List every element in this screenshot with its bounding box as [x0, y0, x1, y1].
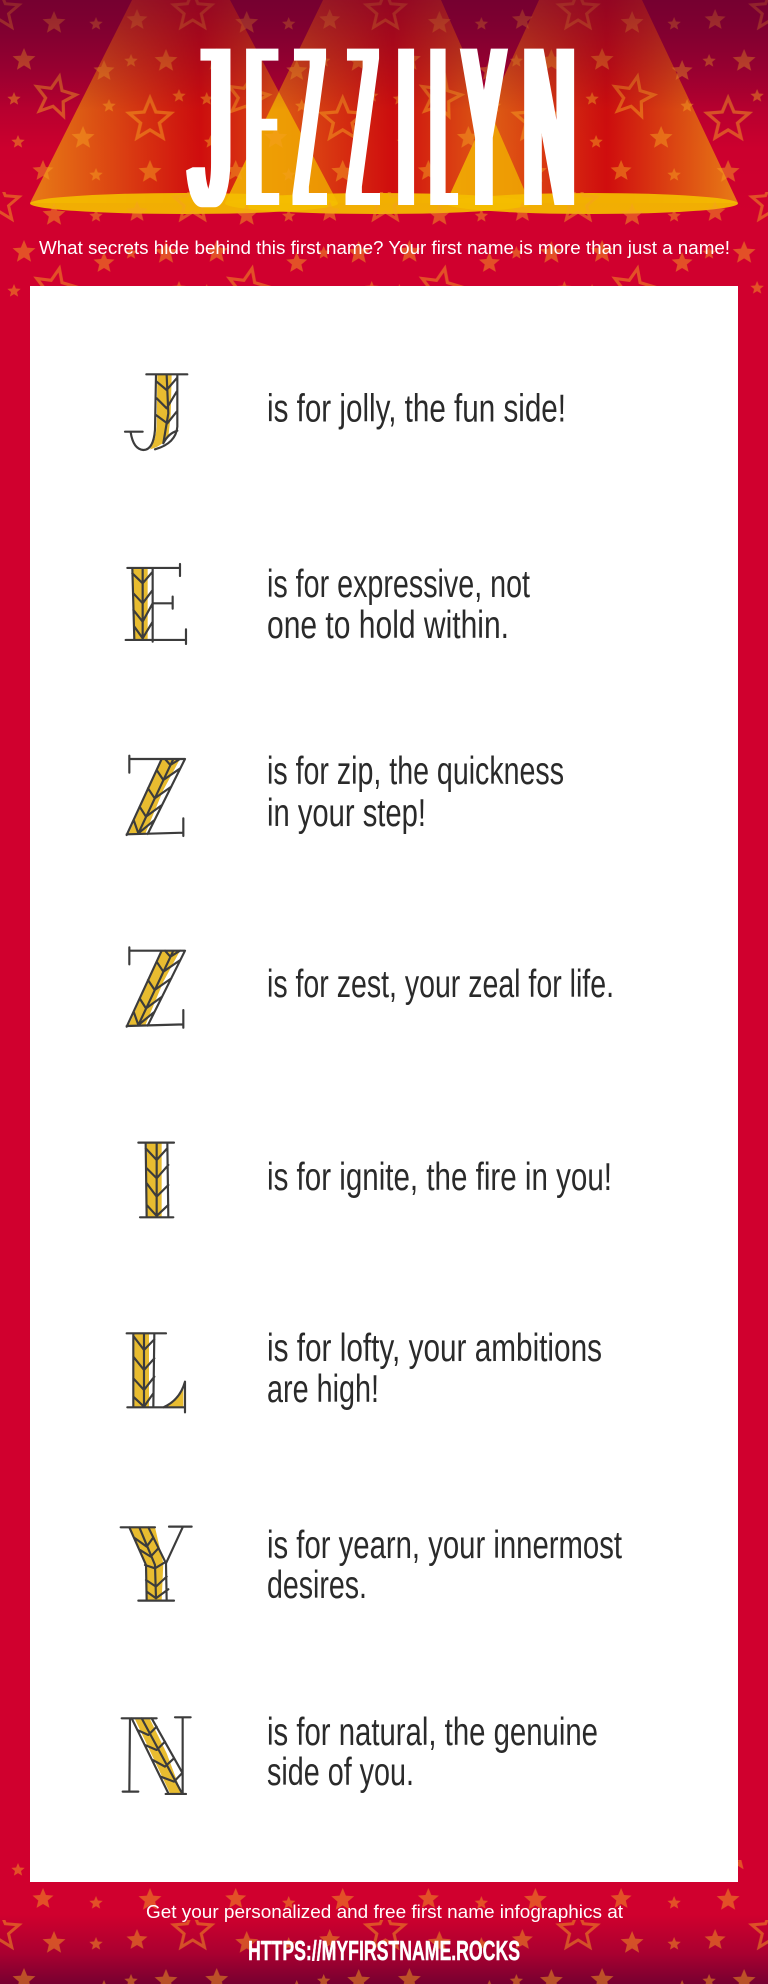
row: J — [125, 374, 566, 450]
row: Y — [121, 1524, 622, 1607]
title: I — [400, 0, 412, 258]
star pattern: top — [0, 0, 768, 302]
text: J: is for jolly, the fun side! — [267, 388, 566, 430]
title: Z — [350, 0, 375, 258]
footer url: HTTPS://MYFIRSTNAME.ROCKS — [248, 1935, 520, 1966]
text: N: is for natural, the genuine — [267, 1711, 598, 1754]
subtitle: What secrets hide behind this first name? Your first name is more than just a name! — [39, 238, 730, 258]
title: Z — [297, 0, 322, 258]
icon: letter J — [125, 374, 187, 450]
title — [190, 0, 574, 259]
star pattern: bottom — [0, 1860, 768, 1984]
title: L — [433, 0, 453, 258]
icon: letter N — [122, 1717, 191, 1794]
icon: letter I — [138, 1143, 174, 1217]
text: Y: is for yearn, your innermost — [267, 1524, 622, 1567]
text: E: is for expressive, not — [267, 563, 530, 606]
icon: letter Y — [121, 1527, 192, 1601]
title: Y — [463, 0, 504, 259]
row: N — [122, 1711, 598, 1794]
text: L: is for lofty, your ambitions — [267, 1327, 602, 1370]
title: E — [249, 0, 275, 258]
title: J — [190, 0, 230, 259]
spotlights — [30, 0, 738, 214]
icon: letter L — [127, 1333, 185, 1412]
icon: letter E — [126, 564, 186, 644]
footer text: Get your personalized and free first name infographics at — [146, 1902, 623, 1922]
text: Z: is for zip, the quickness — [267, 750, 564, 793]
row: Z — [127, 750, 564, 836]
title: N — [525, 0, 574, 258]
row: N: side of you. — [267, 1751, 414, 1794]
shading: top — [0, 0, 768, 110]
text: Z second: is for zest, your zeal for life. — [267, 963, 614, 1006]
text: I: is for ignite, the fire in you! — [267, 1156, 612, 1199]
row: Z second — [127, 947, 614, 1028]
row: L — [127, 1327, 602, 1412]
icon: letter Z — [127, 947, 185, 1028]
row: L: are high! — [267, 1368, 379, 1411]
icon: letter Z — [127, 756, 185, 836]
row: E — [126, 563, 530, 647]
row: E: one to hold within. — [267, 604, 509, 647]
panel: letters — [30, 286, 738, 1882]
row: I — [138, 1143, 612, 1217]
row: Y: desires. — [267, 1564, 367, 1607]
row: Z: in your step! — [267, 792, 426, 835]
